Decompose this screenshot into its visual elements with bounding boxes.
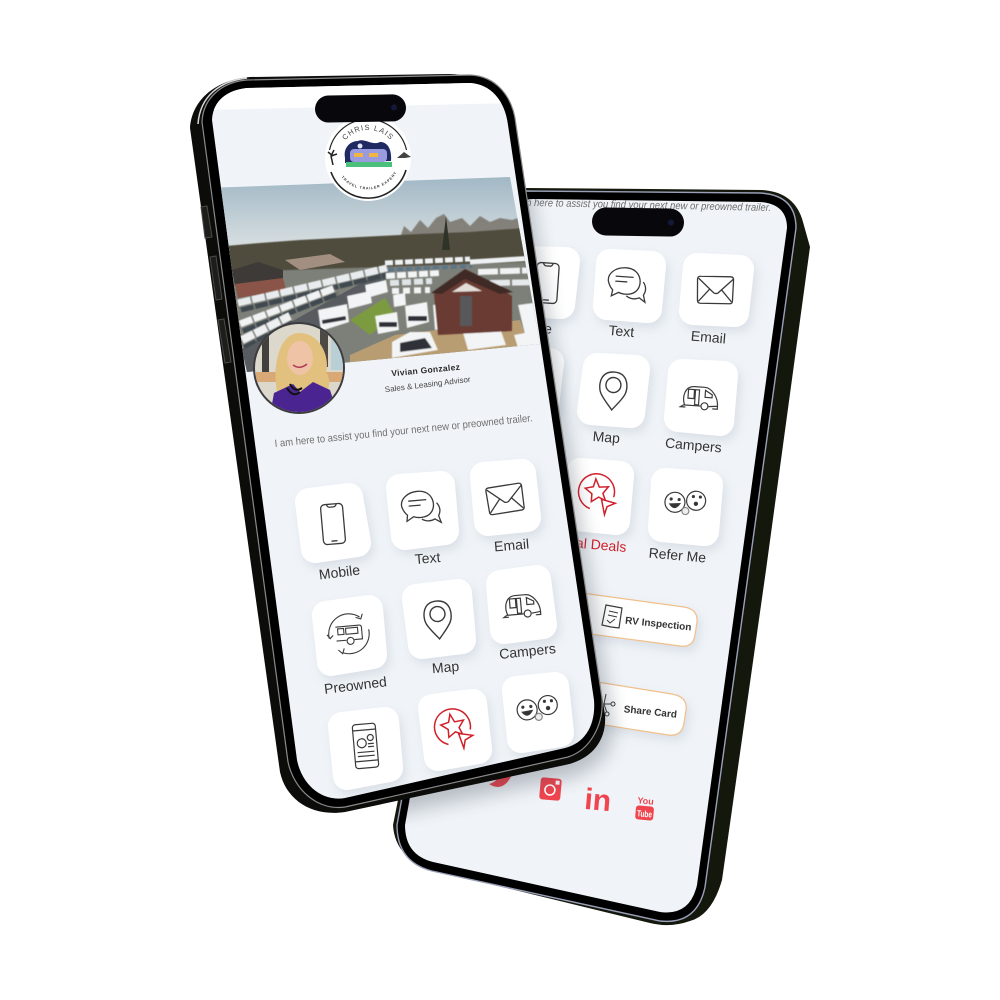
back tile labels: Mobile [510, 317, 553, 337]
front tile labels: Preowned [323, 673, 388, 697]
icon: youtube [635, 797, 654, 820]
hero photo: RV dealership [221, 177, 540, 372]
front phone screen [212, 83, 594, 799]
back phone [393, 188, 810, 926]
advisor name: Vivian Gonzalez [391, 362, 461, 378]
back tile labels: Map [592, 428, 621, 446]
icon: linkedin: in [583, 783, 613, 818]
front tile icons [320, 483, 559, 769]
button: RV Inspection [586, 593, 702, 653]
front tile labels: Map [431, 658, 460, 676]
back notch [592, 207, 684, 237]
trailer rows [238, 258, 545, 358]
front tile labels: Campers [498, 640, 557, 662]
brick showroom [434, 272, 512, 335]
social icons [489, 776, 654, 820]
icon: twitter [489, 776, 511, 787]
front tile grid [309, 473, 560, 776]
back tile icons [535, 262, 734, 516]
logo: palm [328, 150, 337, 165]
white top strip [214, 83, 502, 110]
logo badge: TRAVEL TRAILER EXPERT [342, 172, 396, 190]
advisor role: Sales & Leasing Advisor [384, 375, 471, 394]
back phone frame [393, 188, 810, 925]
icon: instagram [539, 777, 562, 801]
front phone frame [190, 74, 605, 813]
side buttons [201, 206, 231, 363]
button: Share Card: Share Card [623, 704, 677, 721]
logo: circular text [338, 130, 398, 160]
front phone [190, 74, 606, 813]
front tile labels: Text [414, 549, 441, 567]
logo: trailer illustration [345, 140, 392, 167]
back tile labels: Refer Me [648, 545, 707, 566]
button: RV Inspection: RV Inspection [625, 616, 692, 633]
icon: youtube: Tube [637, 808, 652, 820]
back phone screen [405, 199, 787, 912]
front tile labels: Email [493, 536, 530, 555]
front tile labels: Mobile [318, 562, 361, 582]
back tile labels: Campers [664, 435, 722, 455]
back tile labels: Email [690, 328, 727, 347]
front notch [315, 94, 406, 123]
back tile labels [546, 325, 726, 562]
tagline: I am here to assist you find your next new or preowned trailer. [274, 412, 533, 450]
button: Share Card [600, 682, 691, 742]
front phone cast shadow [406, 199, 622, 822]
far trees [400, 214, 528, 252]
logo badge: CHRIS LAIS [342, 124, 393, 140]
back tagline: I am here to assist you find your next new or preowned trailer. [513, 197, 771, 214]
logo: jet ski [397, 152, 411, 158]
icon: youtube: You [637, 795, 654, 807]
profile photo [253, 322, 345, 414]
back tile labels: Special Deals [540, 532, 627, 555]
logo badge [325, 122, 411, 201]
back tile labels: Text [608, 322, 635, 340]
back tile grid [505, 260, 740, 532]
road [240, 270, 392, 372]
front tile labels [318, 536, 557, 697]
